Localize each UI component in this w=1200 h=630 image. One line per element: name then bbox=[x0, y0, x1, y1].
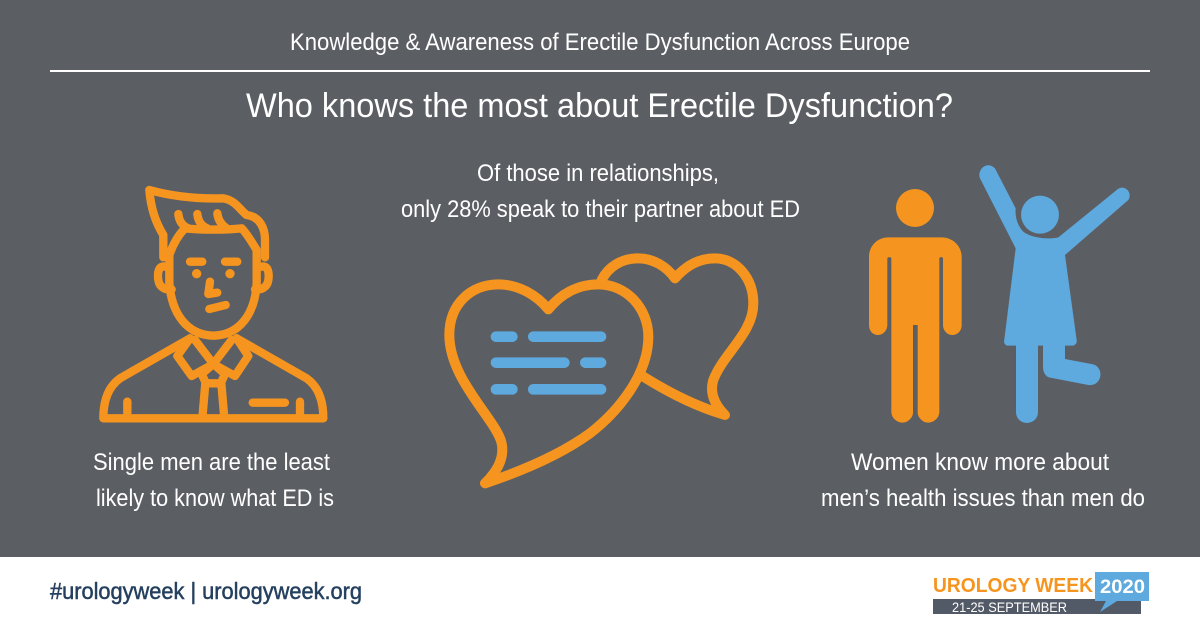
woman figure bbox=[979, 165, 1130, 423]
centre statement: only 28% speak to their partner about ED bbox=[401, 196, 800, 223]
right caption: men’s health issues than men do bbox=[821, 485, 1145, 512]
left caption: Single men are the least bbox=[93, 449, 330, 476]
right caption bbox=[821, 449, 1145, 512]
left caption bbox=[93, 449, 334, 512]
main title: Who knows the most about Erectile Dysfunction? bbox=[246, 87, 953, 125]
footer hashtag and website: #urologyweek | urologyweek.org bbox=[50, 578, 362, 604]
right caption: Women know more about bbox=[851, 449, 1109, 476]
centre statement: Of those in relationships, bbox=[477, 160, 719, 187]
icon: single man bbox=[103, 190, 323, 418]
centre statement bbox=[401, 160, 800, 223]
icon: heart speech bubbles bbox=[449, 258, 753, 483]
logo: Urology Week 2020 bbox=[933, 572, 1149, 615]
logo: Urology Week 2020: 2020 bbox=[1100, 577, 1145, 598]
left caption: likely to know what ED is bbox=[96, 485, 334, 512]
logo: Urology Week 2020: UROLOGY WEEK bbox=[933, 575, 1094, 597]
logo: Urology Week 2020: 21-25 SEPTEMBER bbox=[952, 599, 1067, 615]
man figure bbox=[869, 189, 962, 423]
icon: man and woman figures bbox=[869, 165, 1130, 423]
header line: Knowledge & Awareness of Erectile Dysfunction Across Europe bbox=[290, 29, 910, 56]
footer band bbox=[0, 557, 1200, 630]
